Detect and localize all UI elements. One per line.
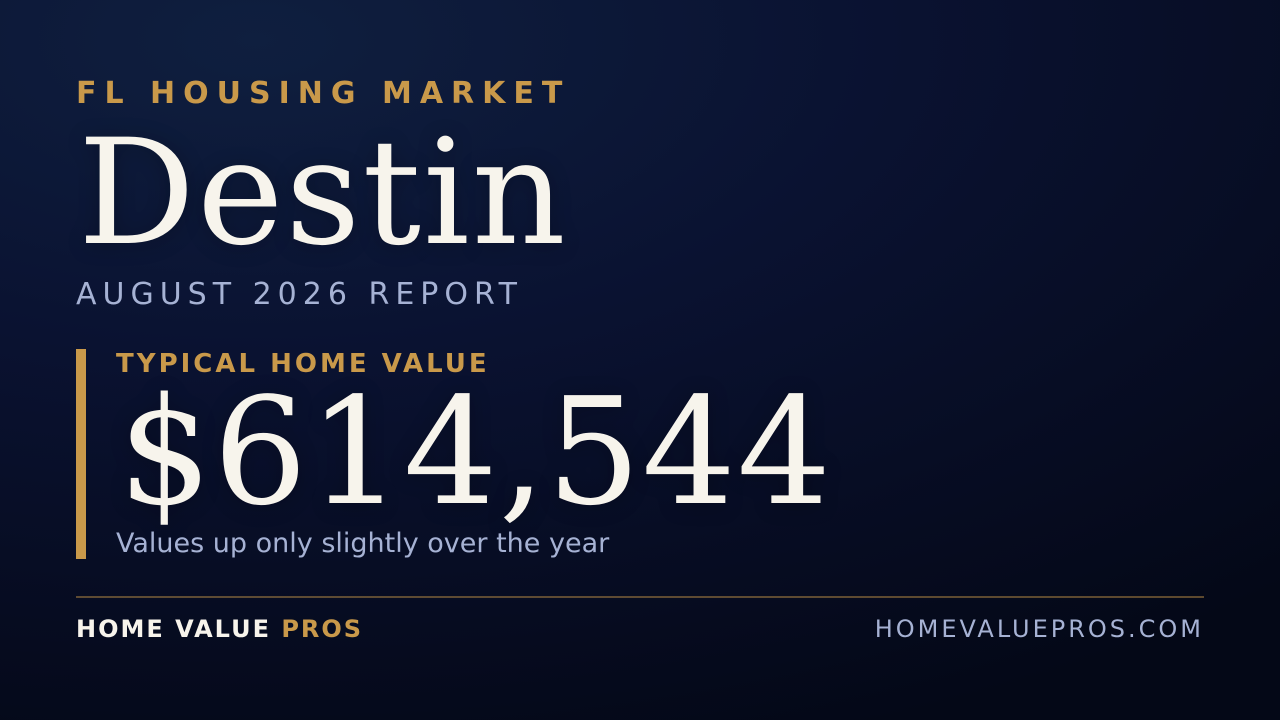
footer brand: HOME VALUE PROS — [76, 615, 363, 643]
accent bar — [76, 349, 86, 559]
subtitle: report date: AUGUST 2026 REPORT — [76, 277, 523, 312]
divider — [76, 596, 1204, 598]
kicker: FL housing market: FL HOUSING MARKET — [76, 76, 570, 111]
panel: typical home value — [76, 349, 832, 559]
title: city name: Destin — [78, 108, 568, 278]
footer website: HOMEVALUEPROS.COM — [875, 615, 1204, 643]
big number: home value: $614,544 — [118, 366, 832, 538]
caption: trend note: Values up only slightly over the year — [116, 528, 609, 559]
label: typical home value: TYPICAL HOME VALUE — [116, 349, 490, 379]
